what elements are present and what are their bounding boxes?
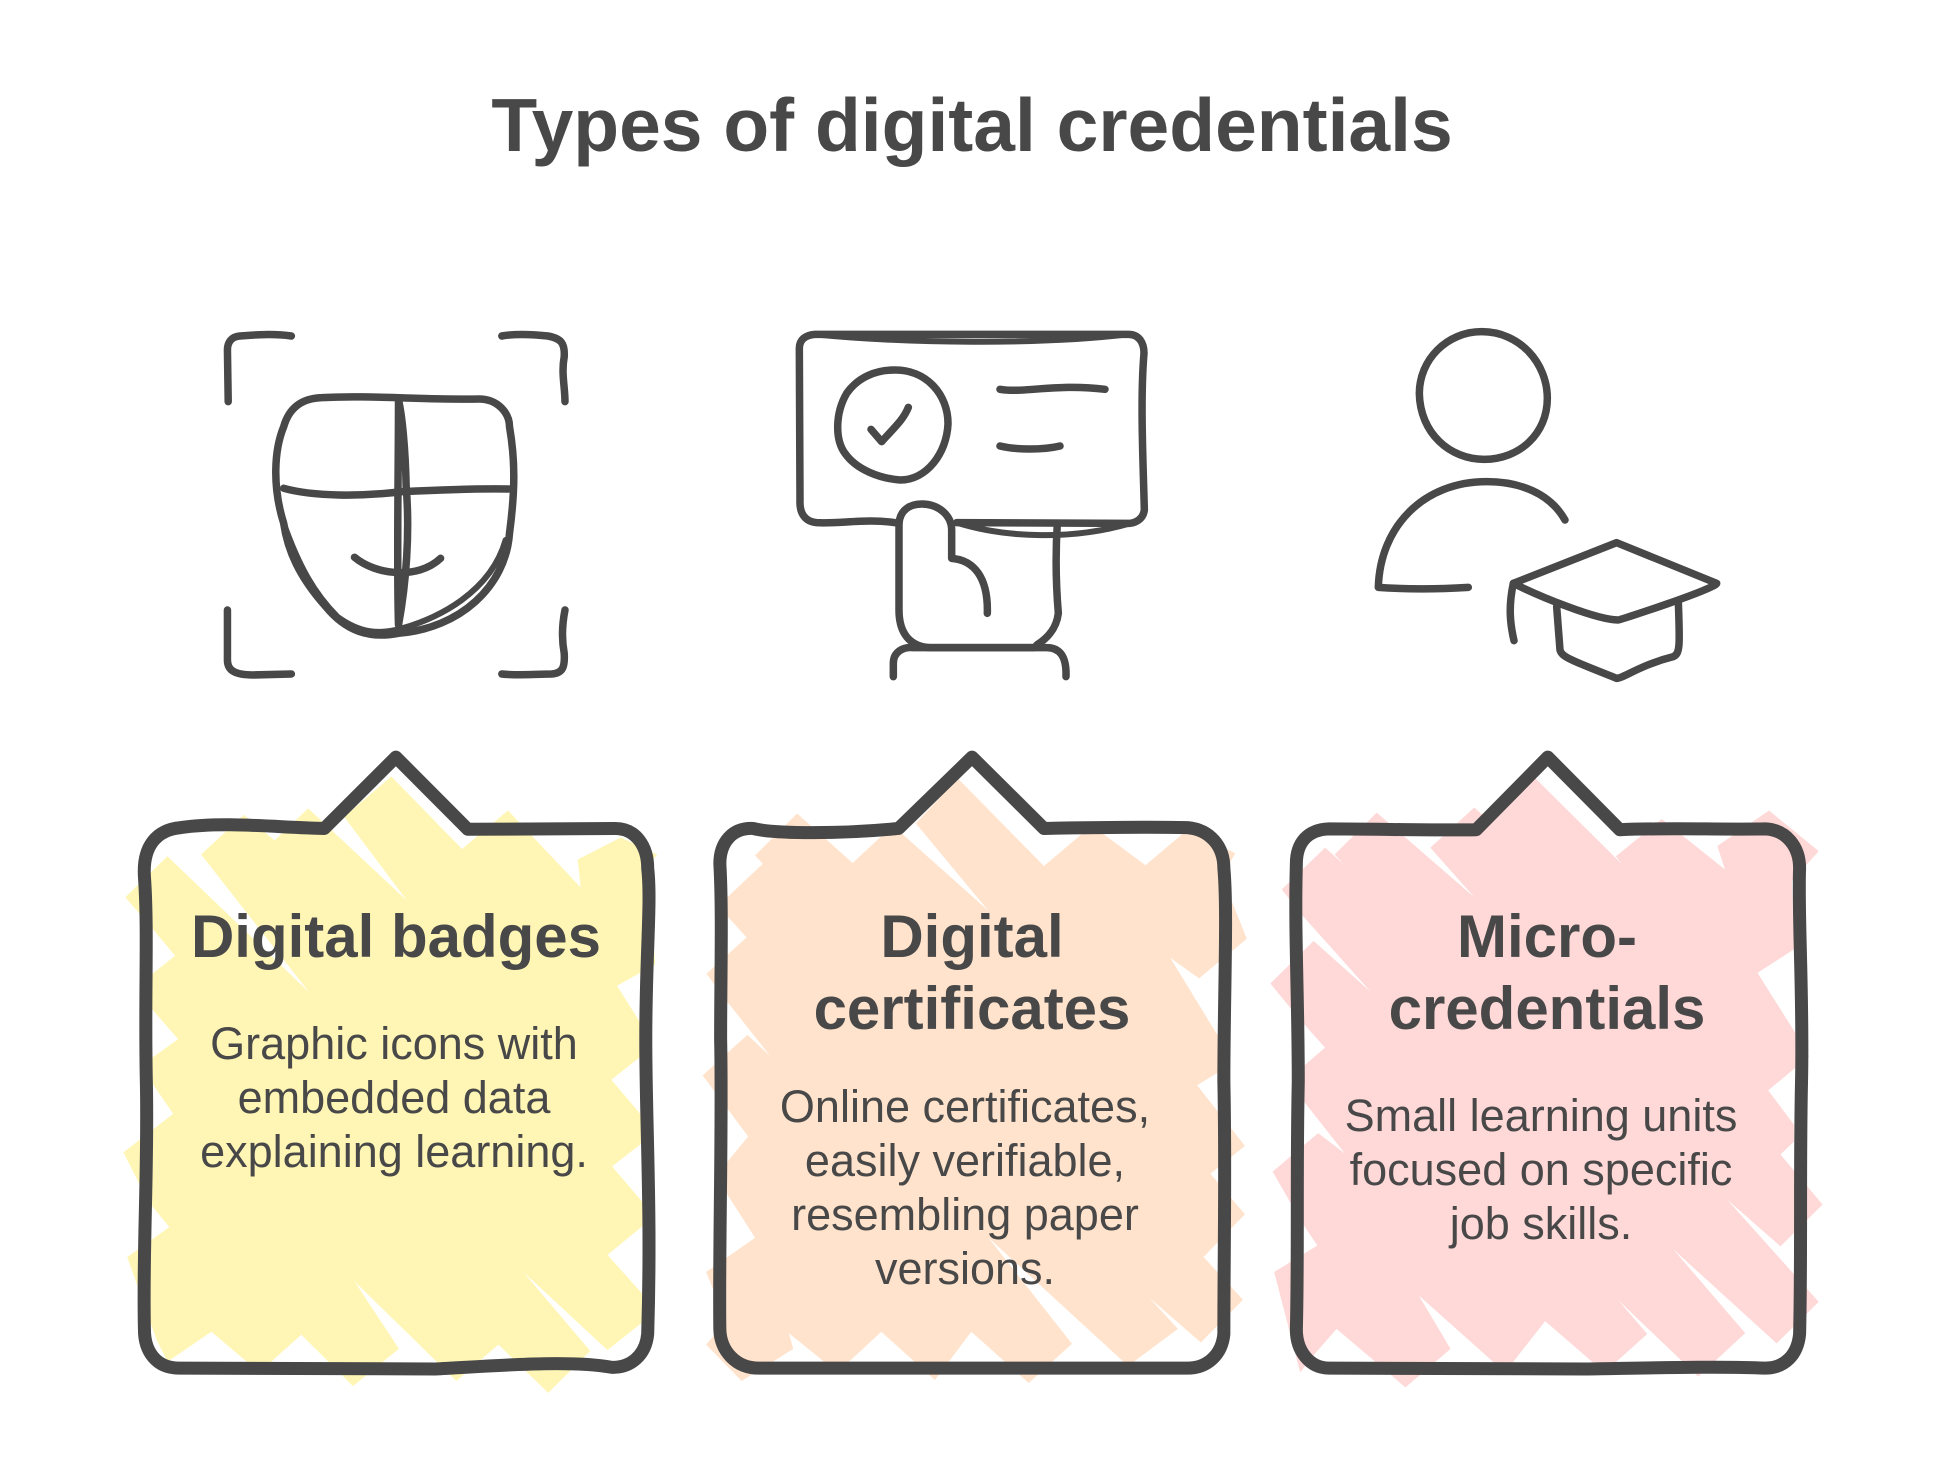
description: versions. [875, 1243, 1055, 1294]
card outline with pointer [144, 757, 649, 1369]
icon: face scan [227, 334, 565, 675]
heading: Micro- [1457, 903, 1637, 970]
description: Online certificates, [780, 1081, 1150, 1132]
description: Small learning units [1345, 1090, 1737, 1141]
panel: micro-credentials [1270, 757, 1823, 1387]
description: embedded data [238, 1072, 551, 1123]
heading: Digital badges [191, 903, 601, 970]
icon: person with graduation cap [1378, 332, 1717, 678]
title: Types of digital credentials [491, 83, 1453, 167]
panel: digital certificates [703, 757, 1247, 1383]
panel: digital badges [123, 757, 657, 1393]
heading: Digital [880, 903, 1064, 970]
description: explaining learning. [200, 1126, 588, 1177]
pink scribble fill [1270, 778, 1823, 1387]
description: easily verifiable, [805, 1135, 1125, 1186]
heading: certificates [814, 975, 1130, 1042]
description: Graphic icons with [210, 1018, 578, 1069]
icon: certificate with hand [799, 334, 1144, 677]
description: resembling paper [791, 1189, 1139, 1240]
card outline with pointer [720, 757, 1226, 1368]
heading: credentials [1389, 975, 1705, 1042]
description: focused on specific [1350, 1144, 1732, 1195]
card outline with pointer [1296, 757, 1802, 1369]
yellow scribble fill [123, 776, 657, 1393]
peach scribble fill [703, 778, 1247, 1383]
description: job skills. [1448, 1198, 1632, 1249]
